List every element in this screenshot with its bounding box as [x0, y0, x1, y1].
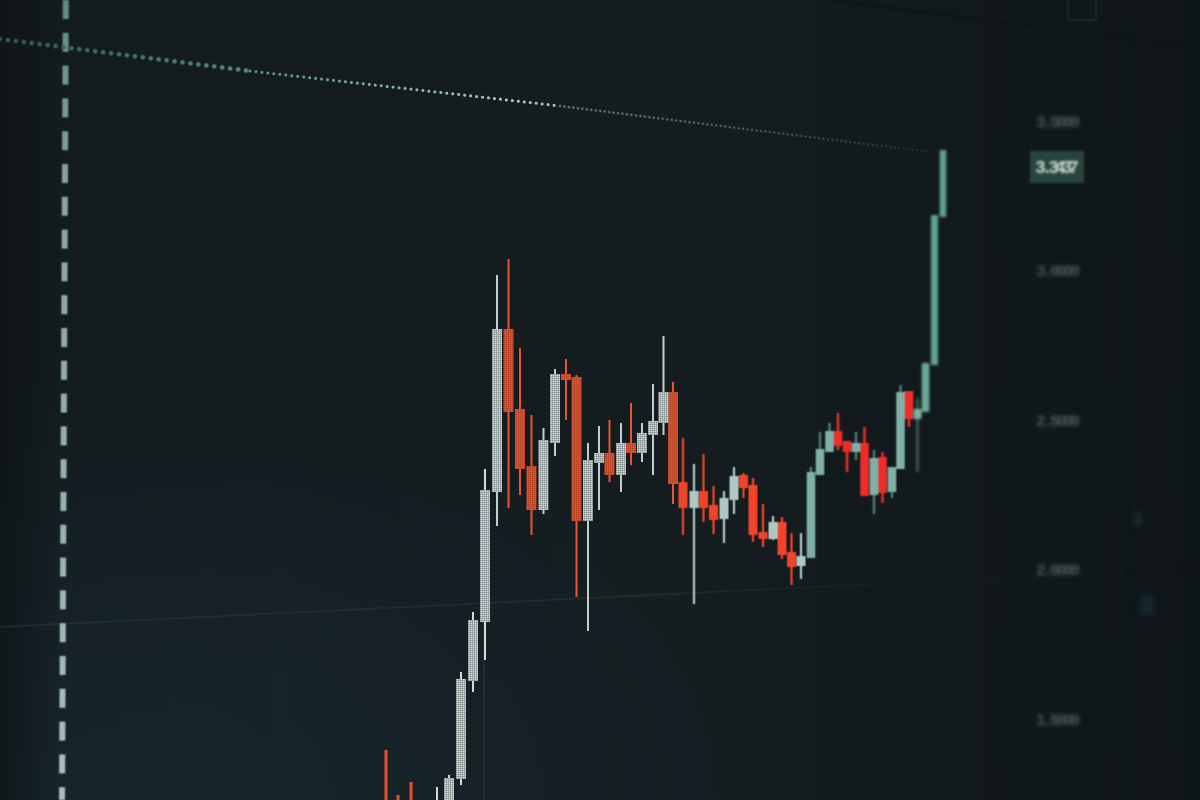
- price axis labels: [1030, 114, 1084, 730]
- candlesticks: final rally section: [918, 150, 943, 472]
- tick labels: 3.0000: [1036, 263, 1080, 281]
- horizontal dotted price line: [0, 39, 930, 152]
- red candles at bottom edge: [386, 750, 411, 800]
- candlesticks: blurred right section: [811, 385, 909, 558]
- current price tag: [1030, 151, 1084, 183]
- tick labels: 1.5000: [1036, 712, 1080, 730]
- current price tag: 3.3437: [1035, 159, 1079, 179]
- tick labels: 2.5000: [1036, 413, 1080, 431]
- red candles: [838, 391, 909, 503]
- red candles: [508, 259, 673, 597]
- red candles: [683, 438, 792, 585]
- small blue blur marks: [1135, 512, 1154, 615]
- vertical dashed crosshair line: [62, 0, 66, 800]
- grey candles: [497, 275, 664, 631]
- teal candles: [811, 385, 900, 558]
- top right corner icon: [1068, 0, 1096, 20]
- tick labels: 2.0000: [1036, 562, 1080, 580]
- candlesticks: sharp middle section: [497, 259, 673, 631]
- candlesticks: lower left rising section: [386, 469, 485, 800]
- tick labels: [1036, 114, 1080, 730]
- grey rising candles: [437, 469, 485, 800]
- tick labels: 3.5000: [1036, 114, 1080, 132]
- grey candles: [694, 464, 801, 604]
- candlesticks: softly focused section: [683, 438, 801, 604]
